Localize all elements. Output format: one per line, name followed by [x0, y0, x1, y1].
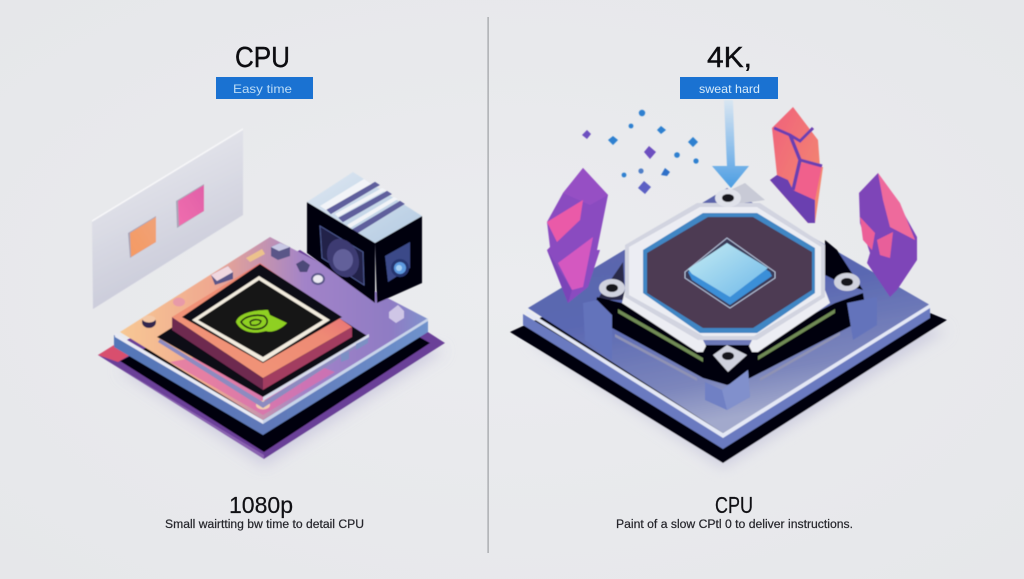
pink square: [176, 184, 204, 228]
right label: sweat hard: [680, 77, 778, 99]
right heading: 4K: 4K,: [707, 42, 752, 74]
screws: [599, 189, 860, 372]
GPU chip: [172, 263, 352, 390]
translucent panel: [92, 128, 243, 309]
right caption title: CPU: [715, 492, 753, 518]
top bracket: [720, 183, 765, 205]
rails and support blocks: [583, 240, 877, 410]
base layer: [98, 250, 445, 459]
left label: Easy time: Easy time: [233, 82, 292, 96]
black base: [510, 230, 947, 463]
board plate: [114, 237, 428, 435]
board shadow: [120, 330, 445, 466]
right caption: [616, 492, 853, 531]
blue gem: [685, 238, 775, 308]
cooling cube: [307, 172, 422, 303]
crystal: back right: [770, 107, 823, 223]
left caption description: Small wairtting bw time to detail CPU: [165, 519, 364, 531]
right illustration: CPU under 4K load: [510, 100, 947, 468]
base shadow: [530, 300, 947, 468]
icon: green logo: [236, 310, 287, 333]
center divider: [488, 17, 489, 553]
data particles: [582, 110, 699, 194]
left caption title: 1080p: [229, 492, 293, 518]
orange square: [128, 216, 156, 258]
left label: Easy time: [216, 77, 313, 99]
crystal: right: [859, 173, 917, 297]
arrow: [712, 100, 749, 188]
right caption description: Paint of a slow CPtl 0 to deliver instructions.: [616, 519, 853, 531]
left caption: [165, 492, 364, 531]
left illustration: graphics card at 1080p: [92, 128, 445, 466]
blue plate: [523, 188, 930, 449]
board components: [142, 243, 404, 410]
crystal: left: [547, 168, 608, 303]
left heading: CPU: CPU: [235, 42, 290, 74]
chip socket: [157, 270, 369, 408]
right label: sweat hard: sweat hard: [699, 82, 760, 96]
hex cooler plate: [622, 203, 830, 352]
